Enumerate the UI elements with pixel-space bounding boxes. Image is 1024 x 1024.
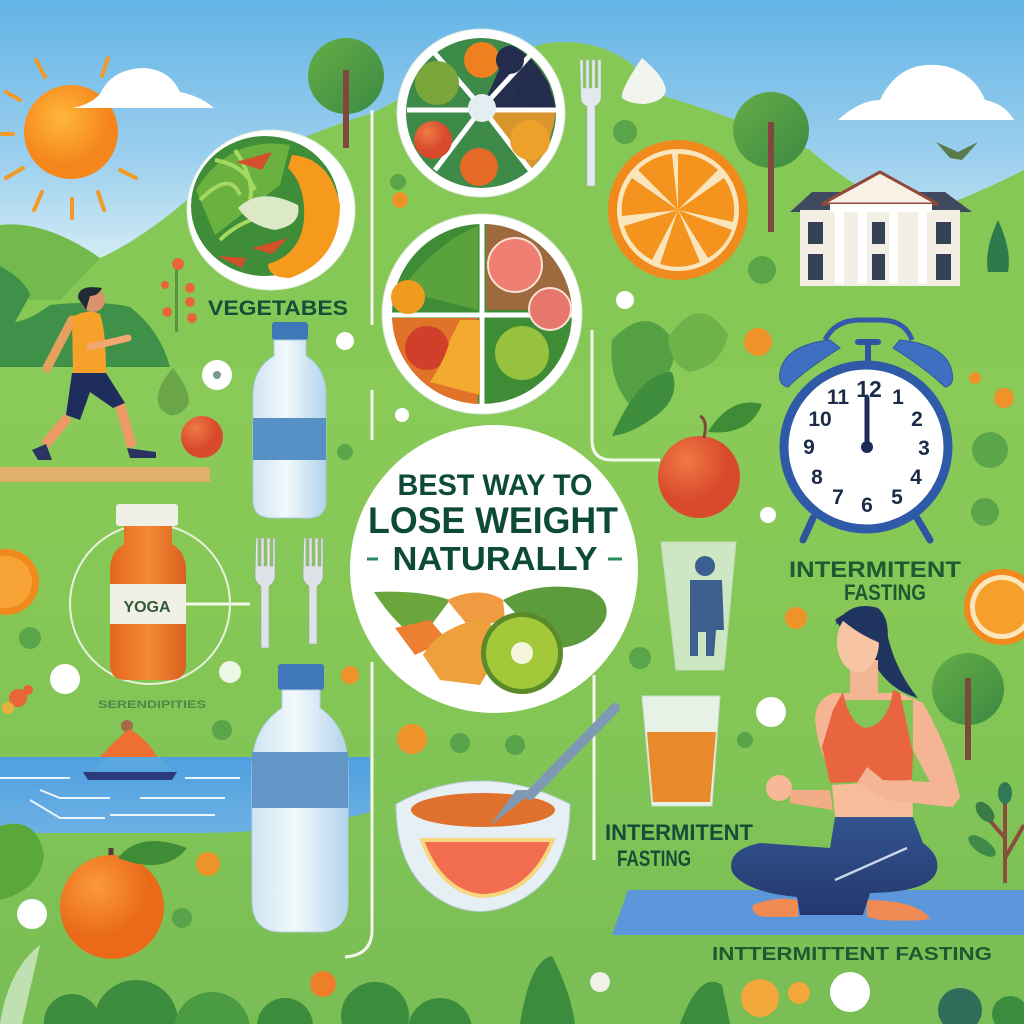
orange fruit lower left: [60, 841, 187, 959]
title: LOSE WEIGHT: [368, 500, 618, 541]
text intermittent fasting right: [789, 557, 962, 605]
scattered orange flowers: [196, 192, 1014, 876]
orange left edge: [0, 549, 39, 615]
red flower plant: [161, 258, 197, 332]
plant branch lower right: [965, 782, 1024, 883]
bird: [936, 142, 978, 160]
alarm clock: 8: [811, 466, 823, 489]
runner: [32, 287, 156, 460]
leaf drop, tomato and flower: [158, 360, 232, 458]
alarm clock: 9: [803, 436, 815, 459]
water bottle 2: [252, 664, 348, 932]
red plant left: [2, 685, 33, 714]
tree top: [308, 38, 384, 148]
center circle title: [350, 425, 638, 713]
title: BEST WAY TO: [398, 469, 592, 502]
text intermittent fasting middle: [605, 820, 754, 871]
yoga mat: [612, 890, 1024, 935]
alarm clock: 6: [861, 494, 873, 517]
bottom flowers: [310, 971, 870, 1017]
alarm clock: 10: [808, 408, 832, 431]
orange right edge: [964, 569, 1024, 645]
small fir tree: [987, 220, 1009, 272]
tree right: [733, 92, 809, 232]
scattered white flowers: [17, 291, 786, 929]
running track: [0, 467, 210, 482]
dinner plate: [382, 214, 582, 414]
lake: [0, 757, 370, 833]
scattered green sprigs: [19, 120, 1008, 928]
yoga woman: [731, 606, 960, 921]
kayaker: [83, 720, 177, 780]
title: NATURALLY: [392, 540, 598, 577]
soup bowl: [396, 708, 615, 912]
orange slice top: [608, 140, 748, 280]
text intermittent fasting middle: INTERMITENT: [605, 820, 754, 845]
title: [368, 469, 618, 577]
forks: [255, 538, 323, 648]
water drop: [622, 58, 666, 104]
leaf left edge: [0, 824, 44, 900]
alarm clock: 1: [892, 386, 904, 409]
apple: [658, 403, 762, 518]
sun: [2, 58, 214, 218]
yoga bottle: YOGA: [123, 599, 171, 616]
tree lower right: [932, 653, 1004, 760]
alarm clock: 5: [891, 486, 903, 509]
fork top: [580, 60, 601, 186]
building: [790, 172, 972, 286]
alarm clock: 4: [910, 466, 922, 489]
salad plate: [187, 130, 355, 290]
glass with figure: [661, 542, 736, 670]
alarm clock: 3: [918, 437, 930, 460]
label left small: SERENDIPITIES: [98, 699, 206, 711]
alarm clock: 2: [911, 408, 923, 431]
path lines: [186, 110, 660, 957]
text intermittent fasting right: FASTING: [844, 580, 926, 605]
text intermittent fasting right: INTERMITENT: [789, 557, 962, 582]
caption bottom: INTTERMITTENT FASTING: [712, 944, 992, 964]
text intermittent fasting middle: FASTING: [617, 846, 691, 871]
bottom foliage: [0, 945, 1024, 1024]
alarm clock: 12: [856, 376, 882, 402]
alarm clock: 11: [827, 386, 849, 409]
juice glass: [642, 696, 720, 806]
alarm clock: 7: [832, 486, 844, 509]
top plate with fruit: [397, 29, 565, 197]
background sky: [0, 0, 1024, 270]
leafy greens: [611, 313, 728, 436]
alarm clock: [780, 320, 953, 540]
center salad: [374, 587, 607, 694]
cloud right: [838, 65, 1014, 120]
water bottle 1: [253, 322, 326, 518]
yoga bottle: [70, 504, 230, 684]
label vegetables: VEGETABES: [208, 297, 348, 320]
